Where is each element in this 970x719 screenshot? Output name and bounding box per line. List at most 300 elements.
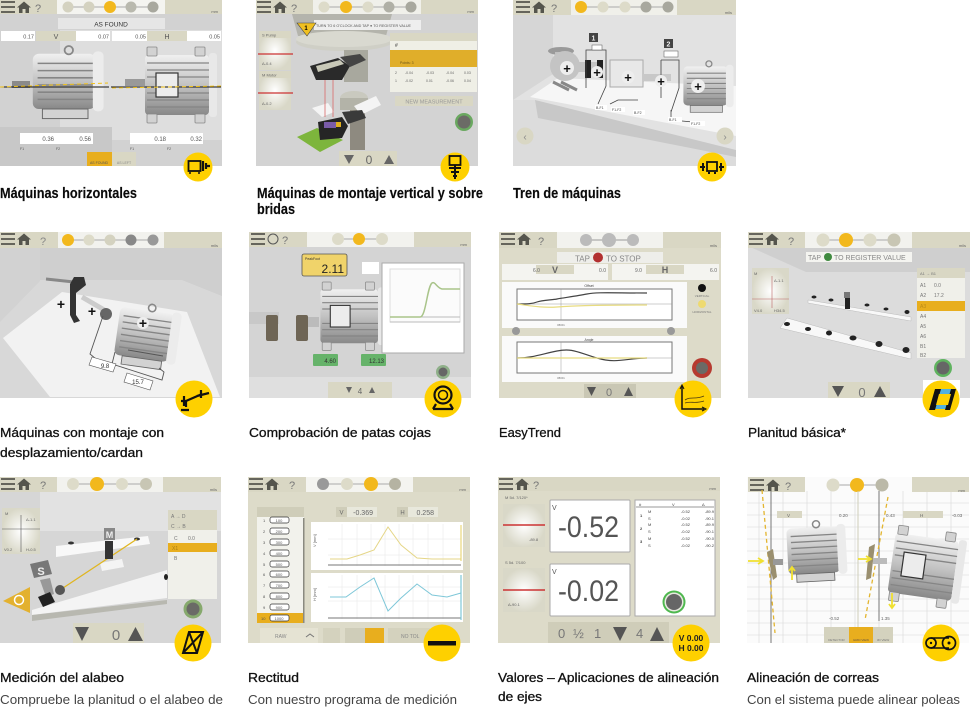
foot values: 0.32	[190, 137, 203, 143]
measurement table: 3	[263, 540, 266, 545]
sensor tile: V0.2	[4, 547, 13, 552]
bottom control bar	[584, 384, 636, 399]
foot values: F2	[56, 147, 60, 151]
tap to register bar: TO REGISTER VALUE	[834, 255, 906, 262]
toolbar: mils	[710, 243, 717, 248]
bottom buttons: 3D VIEW	[877, 638, 889, 642]
as found bar: AS FOUND	[94, 22, 128, 28]
toolbar: mm	[459, 487, 467, 492]
bottom control bar	[328, 382, 392, 398]
toolbar	[256, 0, 478, 15]
foot values: 0.36	[42, 137, 55, 143]
sensor tile: H-0.5	[26, 547, 37, 552]
plus markers: +	[624, 70, 632, 85]
foot values: F1	[130, 147, 134, 151]
icon: soft foot	[424, 380, 462, 418]
sensor tile: Δ-1.1	[26, 517, 36, 522]
text: medición del alabeo: Medición del alabeo	[0, 670, 124, 685]
results table	[390, 33, 477, 92]
bottom control bar	[339, 151, 397, 167]
leader lines and number tags: 2	[667, 42, 671, 48]
readings table: 2	[640, 526, 643, 531]
readings table: S	[648, 529, 651, 534]
icon: twist	[174, 624, 212, 662]
toolbar	[513, 0, 736, 15]
bottom buttons	[824, 627, 893, 643]
point list: A3	[920, 304, 926, 310]
toolbar	[0, 477, 221, 492]
tap to stop bar	[557, 252, 663, 264]
toolbar	[748, 232, 970, 248]
value row: 0.17	[23, 34, 34, 40]
leader lines and number tags: B-F1	[669, 118, 677, 122]
as found bar	[58, 18, 165, 29]
foot value tags	[313, 354, 386, 366]
value boxes: 9.0	[635, 268, 642, 274]
results table: -0.02	[405, 79, 413, 83]
bottom buttons: NO TOL	[401, 634, 420, 640]
foot value tags: 12.13	[369, 359, 385, 365]
bottom control bar: 4	[358, 387, 363, 396]
value labels	[777, 511, 963, 621]
foot values: F2	[167, 147, 171, 151]
foot values: 0.56	[79, 137, 92, 143]
offset chart	[502, 282, 687, 328]
leader lines and number tags: F1-F2	[691, 122, 700, 126]
carousel arrows	[516, 128, 734, 144]
value boxes: 6.0	[533, 268, 540, 274]
panel: valores	[498, 477, 720, 643]
sensor tiles: M Motor	[262, 72, 277, 78]
register button	[436, 365, 450, 379]
peak value box: 2.11	[322, 262, 344, 276]
offset chart: 08:01	[557, 323, 565, 327]
cardan shaft and motor	[46, 277, 183, 372]
results table: 0.03	[464, 71, 471, 75]
panel: planitud básica	[748, 232, 970, 400]
value boxes: 6.0	[710, 268, 717, 274]
bottom buttons	[260, 628, 430, 643]
new measurement button: NEW MEASUREMENT	[405, 100, 463, 106]
V and H readouts: -0.369	[353, 510, 373, 517]
V and H readouts: V	[339, 510, 344, 516]
bottom buttons: GRID VIEW	[853, 638, 869, 642]
readings table: S	[648, 543, 651, 548]
angle chart: Angle	[585, 338, 594, 342]
toolbar: mils	[210, 487, 217, 492]
value labels: 0.20	[839, 513, 848, 518]
value boxes: 0.0	[599, 268, 606, 274]
point list: A1 → B1	[920, 271, 937, 276]
toolbar: ?	[551, 3, 557, 15]
machine base	[530, 78, 736, 157]
text: medición del alabeo	[0, 670, 223, 707]
angle chart	[502, 336, 687, 382]
tap to stop bar: TO STOP	[606, 254, 641, 264]
title: valores	[498, 670, 719, 704]
value boxes: V	[552, 265, 558, 275]
readings table: 3	[640, 539, 643, 544]
value row: 0.05	[135, 34, 146, 40]
readings table: -90.1	[705, 516, 715, 521]
value labels: H	[920, 513, 923, 518]
readings table: -0.52	[681, 522, 691, 527]
measurement callouts: 9.8	[101, 364, 110, 370]
icon: easytrend	[674, 380, 712, 418]
toolbar	[248, 477, 470, 492]
bottom control bar: 4	[636, 626, 643, 641]
value labels: -0.03	[952, 513, 963, 518]
offset chart: Offset	[584, 284, 594, 288]
readings table: -90.1	[705, 529, 715, 534]
icon: values: V 0.00	[679, 633, 704, 643]
value boxes: H	[662, 265, 668, 275]
leader lines and number tags: F1-F2	[612, 108, 621, 112]
plus markers: +	[563, 61, 571, 76]
bottom control bar	[548, 622, 669, 643]
panel: easytrend	[499, 232, 721, 399]
text: alineación de correas: Con el sistema puede alinear poleas	[747, 692, 960, 707]
foot value tags: 4.60	[324, 359, 337, 365]
text: rectitud	[248, 670, 457, 707]
sensor tile: M	[754, 271, 757, 276]
bottom control bar	[828, 382, 890, 400]
panel: patas cojas	[249, 232, 471, 398]
measurement table: 300	[276, 540, 283, 545]
measurement table: 700	[276, 583, 283, 588]
results table: 0.04	[464, 79, 471, 83]
value boxes	[502, 264, 719, 280]
title: patas cojas: Comprobación de patas cojas	[249, 425, 432, 440]
results table: -0.04	[405, 71, 413, 75]
readings table: M	[648, 509, 651, 514]
sensor tile S	[503, 560, 545, 612]
motors	[767, 519, 968, 610]
measurement table: 4	[263, 551, 266, 556]
readings table: -90.2	[705, 543, 715, 548]
sensor tile: Δ-1.1	[774, 278, 784, 283]
leader lines and number tags: 1	[592, 36, 596, 42]
toolbar: mm	[211, 9, 219, 14]
toolbar	[499, 232, 721, 248]
value row	[1, 31, 221, 41]
point list: B	[174, 556, 178, 562]
title: valores: de ejes	[498, 689, 543, 704]
readings table: M	[648, 522, 651, 527]
value row: 0.05	[209, 34, 220, 40]
measurement table: 6	[263, 572, 266, 577]
toolbar: mm	[709, 486, 717, 491]
sensor tile	[752, 268, 789, 314]
vertical chart: V [mm]	[312, 534, 317, 547]
measurement callouts	[89, 316, 164, 390]
laser line and sensors	[30, 528, 137, 607]
results table: 1	[395, 79, 397, 83]
measurement table: 5	[263, 562, 266, 567]
measurement table: 800	[276, 594, 283, 599]
plus markers: +	[139, 315, 147, 331]
point list	[168, 510, 217, 599]
toolbar: ?	[538, 236, 544, 248]
readings table: V	[672, 502, 675, 507]
bottom control bar: 0	[112, 627, 120, 644]
readings table: -0.02	[681, 516, 691, 521]
panel: rectitud	[248, 477, 470, 643]
pump, gearbox and motor	[548, 47, 734, 112]
toolbar: ?	[788, 236, 794, 248]
tap to register bar	[806, 252, 912, 262]
motor and coupling	[249, 282, 385, 350]
register button	[455, 113, 473, 131]
point list: A5	[920, 324, 926, 330]
measurement table: 9	[263, 605, 266, 610]
title: máquinas horizontales: Máquinas horizontales	[0, 185, 137, 202]
toolbar: ?	[40, 480, 46, 492]
sensor tile: M	[5, 511, 8, 516]
bottom control bar: 0	[558, 626, 565, 641]
toolbar: mils	[725, 10, 732, 15]
readings table: -0.02	[681, 543, 691, 548]
point list: C	[174, 536, 178, 542]
point list: A4	[920, 314, 926, 320]
point list: 17.2	[934, 293, 944, 299]
tap to stop bar: TAP	[575, 254, 590, 264]
point list: 0.0	[188, 536, 195, 542]
toolbar: mils	[211, 243, 218, 248]
rotate arrow	[3, 587, 30, 613]
plus markers	[57, 296, 149, 331]
toolbar: mm	[958, 488, 966, 493]
toolbar: mils	[959, 243, 966, 248]
bottom buttons: DETECTOR	[828, 638, 846, 642]
new measurement button	[395, 96, 473, 106]
toolbar	[0, 0, 222, 15]
sensor tiles	[258, 31, 293, 110]
plus markers: +	[694, 79, 702, 94]
icon: belt alignment	[922, 624, 960, 662]
legend: HORIZONTAL	[692, 310, 712, 314]
motors with alignment line	[0, 46, 221, 123]
value row: H	[164, 34, 170, 41]
vertical chart	[311, 522, 463, 570]
V value -0.52: -0.52	[558, 511, 619, 544]
measurement table: 8	[263, 594, 266, 599]
register button	[934, 359, 952, 377]
register button	[184, 600, 202, 618]
results table: Points: 3	[400, 61, 414, 65]
toolbar: ?	[785, 481, 791, 493]
panel: tren de máquinas	[513, 0, 736, 166]
results table: -0.06	[446, 79, 454, 83]
toolbar: ?	[282, 235, 288, 247]
title: valores: Valores – Aplicaciones de alineación	[498, 670, 719, 685]
measurement table: 2	[263, 529, 266, 534]
icon: basic flatness	[922, 380, 960, 418]
title: máquinas con montaje	[0, 425, 164, 460]
flatness rails	[780, 292, 911, 359]
measurement table: 100	[276, 518, 283, 523]
warning and instruction	[297, 20, 421, 36]
legend: VERTICAL	[695, 294, 710, 298]
horizontal chart	[311, 573, 463, 622]
carousel arrows: ›	[723, 132, 727, 143]
V and H readouts	[336, 507, 438, 517]
carousel arrows: ‹	[523, 132, 527, 143]
foot values: 0.18	[154, 137, 167, 143]
measurement table	[257, 507, 304, 623]
sensor tile S: Δ-90.1	[508, 602, 521, 607]
grid	[747, 491, 969, 643]
toolbar: ?	[289, 480, 295, 492]
value labels: 1.35	[881, 616, 890, 621]
point list: 0.0	[934, 283, 941, 289]
bottom control bar: 1	[594, 626, 601, 641]
measurement table: 7	[263, 583, 266, 588]
value labels: 0.43	[886, 513, 895, 518]
bottom control bar: ½	[573, 626, 584, 641]
readings table: M	[648, 536, 651, 541]
icon: vertical machines	[440, 152, 470, 182]
readings table: #	[639, 502, 642, 507]
sensor tile M: M 5d. 7/120*	[505, 495, 528, 500]
sensor tiles: Δ-0.2	[262, 101, 272, 106]
title: máquinas de montaje vertical	[257, 185, 483, 218]
V value -0.02: V	[552, 569, 557, 576]
icon: values: H 0.00	[678, 643, 704, 653]
plus markers: +	[88, 303, 96, 319]
toolbar: ?	[291, 3, 297, 15]
bottom control bar	[73, 623, 144, 644]
view buttons: AS FOUND	[90, 161, 109, 165]
toolbar: ?	[40, 236, 46, 248]
plus markers: +	[657, 74, 665, 89]
title: máquinas de montaje vertical: bridas	[257, 201, 295, 218]
stop button	[692, 358, 712, 378]
plus markers: +	[593, 65, 601, 80]
sensor tile	[2, 508, 40, 554]
measurement table: 1	[263, 518, 266, 523]
value labels: V	[787, 513, 790, 518]
point list: C → B	[171, 524, 186, 530]
panel: montaje con desplazamiento	[0, 232, 222, 398]
toolbar	[249, 232, 471, 247]
measurement callouts: 15.7	[132, 380, 144, 386]
register button	[662, 590, 686, 614]
warning and instruction: TURN TO 6 O'CLOCK AND TAP ● TO REGISTER VALUE	[316, 24, 412, 28]
graph window	[362, 262, 464, 353]
readings table: -89.9	[705, 522, 715, 527]
V value -0.02	[550, 564, 630, 616]
sensor tile S: S 5d. 7/100	[505, 560, 526, 565]
tap to register bar: TAP	[808, 255, 821, 262]
sensor tile M: -89.8	[529, 537, 539, 542]
panel: alineación de correas	[747, 477, 969, 643]
sensor tile: H34.5	[774, 308, 785, 313]
point list: A2	[920, 293, 926, 299]
measurement table: 200	[276, 529, 283, 534]
sensor tiles: S Pump	[262, 32, 277, 38]
shaft lines	[762, 490, 888, 643]
laser line and sensors: M	[106, 530, 113, 540]
warning and instruction: 1	[304, 26, 308, 32]
readings table: -0.52	[681, 509, 691, 514]
sensor tile M	[503, 495, 545, 547]
readings table: -0.52	[681, 536, 691, 541]
icon: values	[672, 624, 710, 662]
measurement table: 400	[276, 551, 283, 556]
angle chart: 08:01	[557, 376, 565, 380]
view buttons: AS LEFT	[117, 161, 132, 165]
bottom control bar: 0	[858, 385, 866, 400]
title: tren de máquinas: Tren de máquinas	[513, 185, 621, 202]
bottom control bar: 0	[606, 387, 612, 399]
text: medición del alabeo: Compruebe la planitud o el alabeo de	[0, 692, 223, 707]
results table: -0.04	[446, 71, 454, 75]
readings table: 1	[640, 513, 643, 518]
text: rectitud: Rectitud	[248, 670, 299, 685]
measurement table: 900	[276, 605, 283, 610]
leader lines and number tags: B-F1	[596, 106, 604, 110]
title: easytrend: EasyTrend	[499, 425, 561, 440]
flange and shafts	[292, 14, 392, 150]
icon: horizontal machines	[184, 152, 212, 182]
toolbar	[748, 477, 969, 493]
point list: A → D	[171, 514, 186, 520]
slider handles	[512, 327, 675, 335]
toolbar: ?	[35, 3, 41, 15]
toolbar: mm	[460, 242, 468, 247]
measurement table: 500	[276, 562, 283, 567]
measurement table: 1000	[275, 616, 284, 621]
peak value box	[302, 254, 347, 276]
title: máquinas con montaje: Máquinas con montaje con	[0, 425, 164, 440]
text: alineación de correas: Alineación de correas	[747, 670, 880, 685]
value row: 0.07	[98, 34, 109, 40]
foot values: F1	[20, 147, 24, 151]
readings table: -0.02	[681, 529, 691, 534]
readings table: S	[648, 516, 651, 521]
text: alineación de correas	[747, 670, 960, 707]
V and H readouts: H	[400, 510, 405, 516]
peak value box: PeakFoot	[305, 257, 320, 261]
platforms	[32, 536, 168, 621]
value labels: -0.52	[829, 616, 840, 621]
toolbar	[498, 477, 720, 492]
point list: A6	[920, 334, 926, 340]
view buttons	[87, 152, 136, 166]
results table: 0.01	[426, 79, 433, 83]
leader lines and number tags: B-F2	[634, 111, 642, 115]
sensors and lasers	[297, 54, 381, 152]
panel: máquinas horizontales	[0, 0, 222, 166]
measurement table: 10	[261, 616, 266, 621]
icon: machine train	[698, 152, 726, 182]
leader lines and number tags	[586, 33, 705, 126]
bottom control bar: 0	[366, 153, 373, 167]
foot values	[20, 133, 203, 151]
value row: V	[54, 34, 59, 41]
readings table	[635, 500, 715, 616]
plus markers	[560, 61, 705, 94]
bottom buttons: RAW	[275, 634, 287, 640]
title: máquinas con montaje: desplazamiento/cardan	[0, 445, 143, 460]
toolbar: mm	[467, 9, 475, 14]
readings table: Δ	[702, 502, 705, 507]
readings table: -89.9	[705, 509, 715, 514]
V value -0.02: -0.02	[558, 575, 619, 608]
point list: B2	[920, 353, 926, 359]
plus markers: +	[57, 296, 65, 312]
